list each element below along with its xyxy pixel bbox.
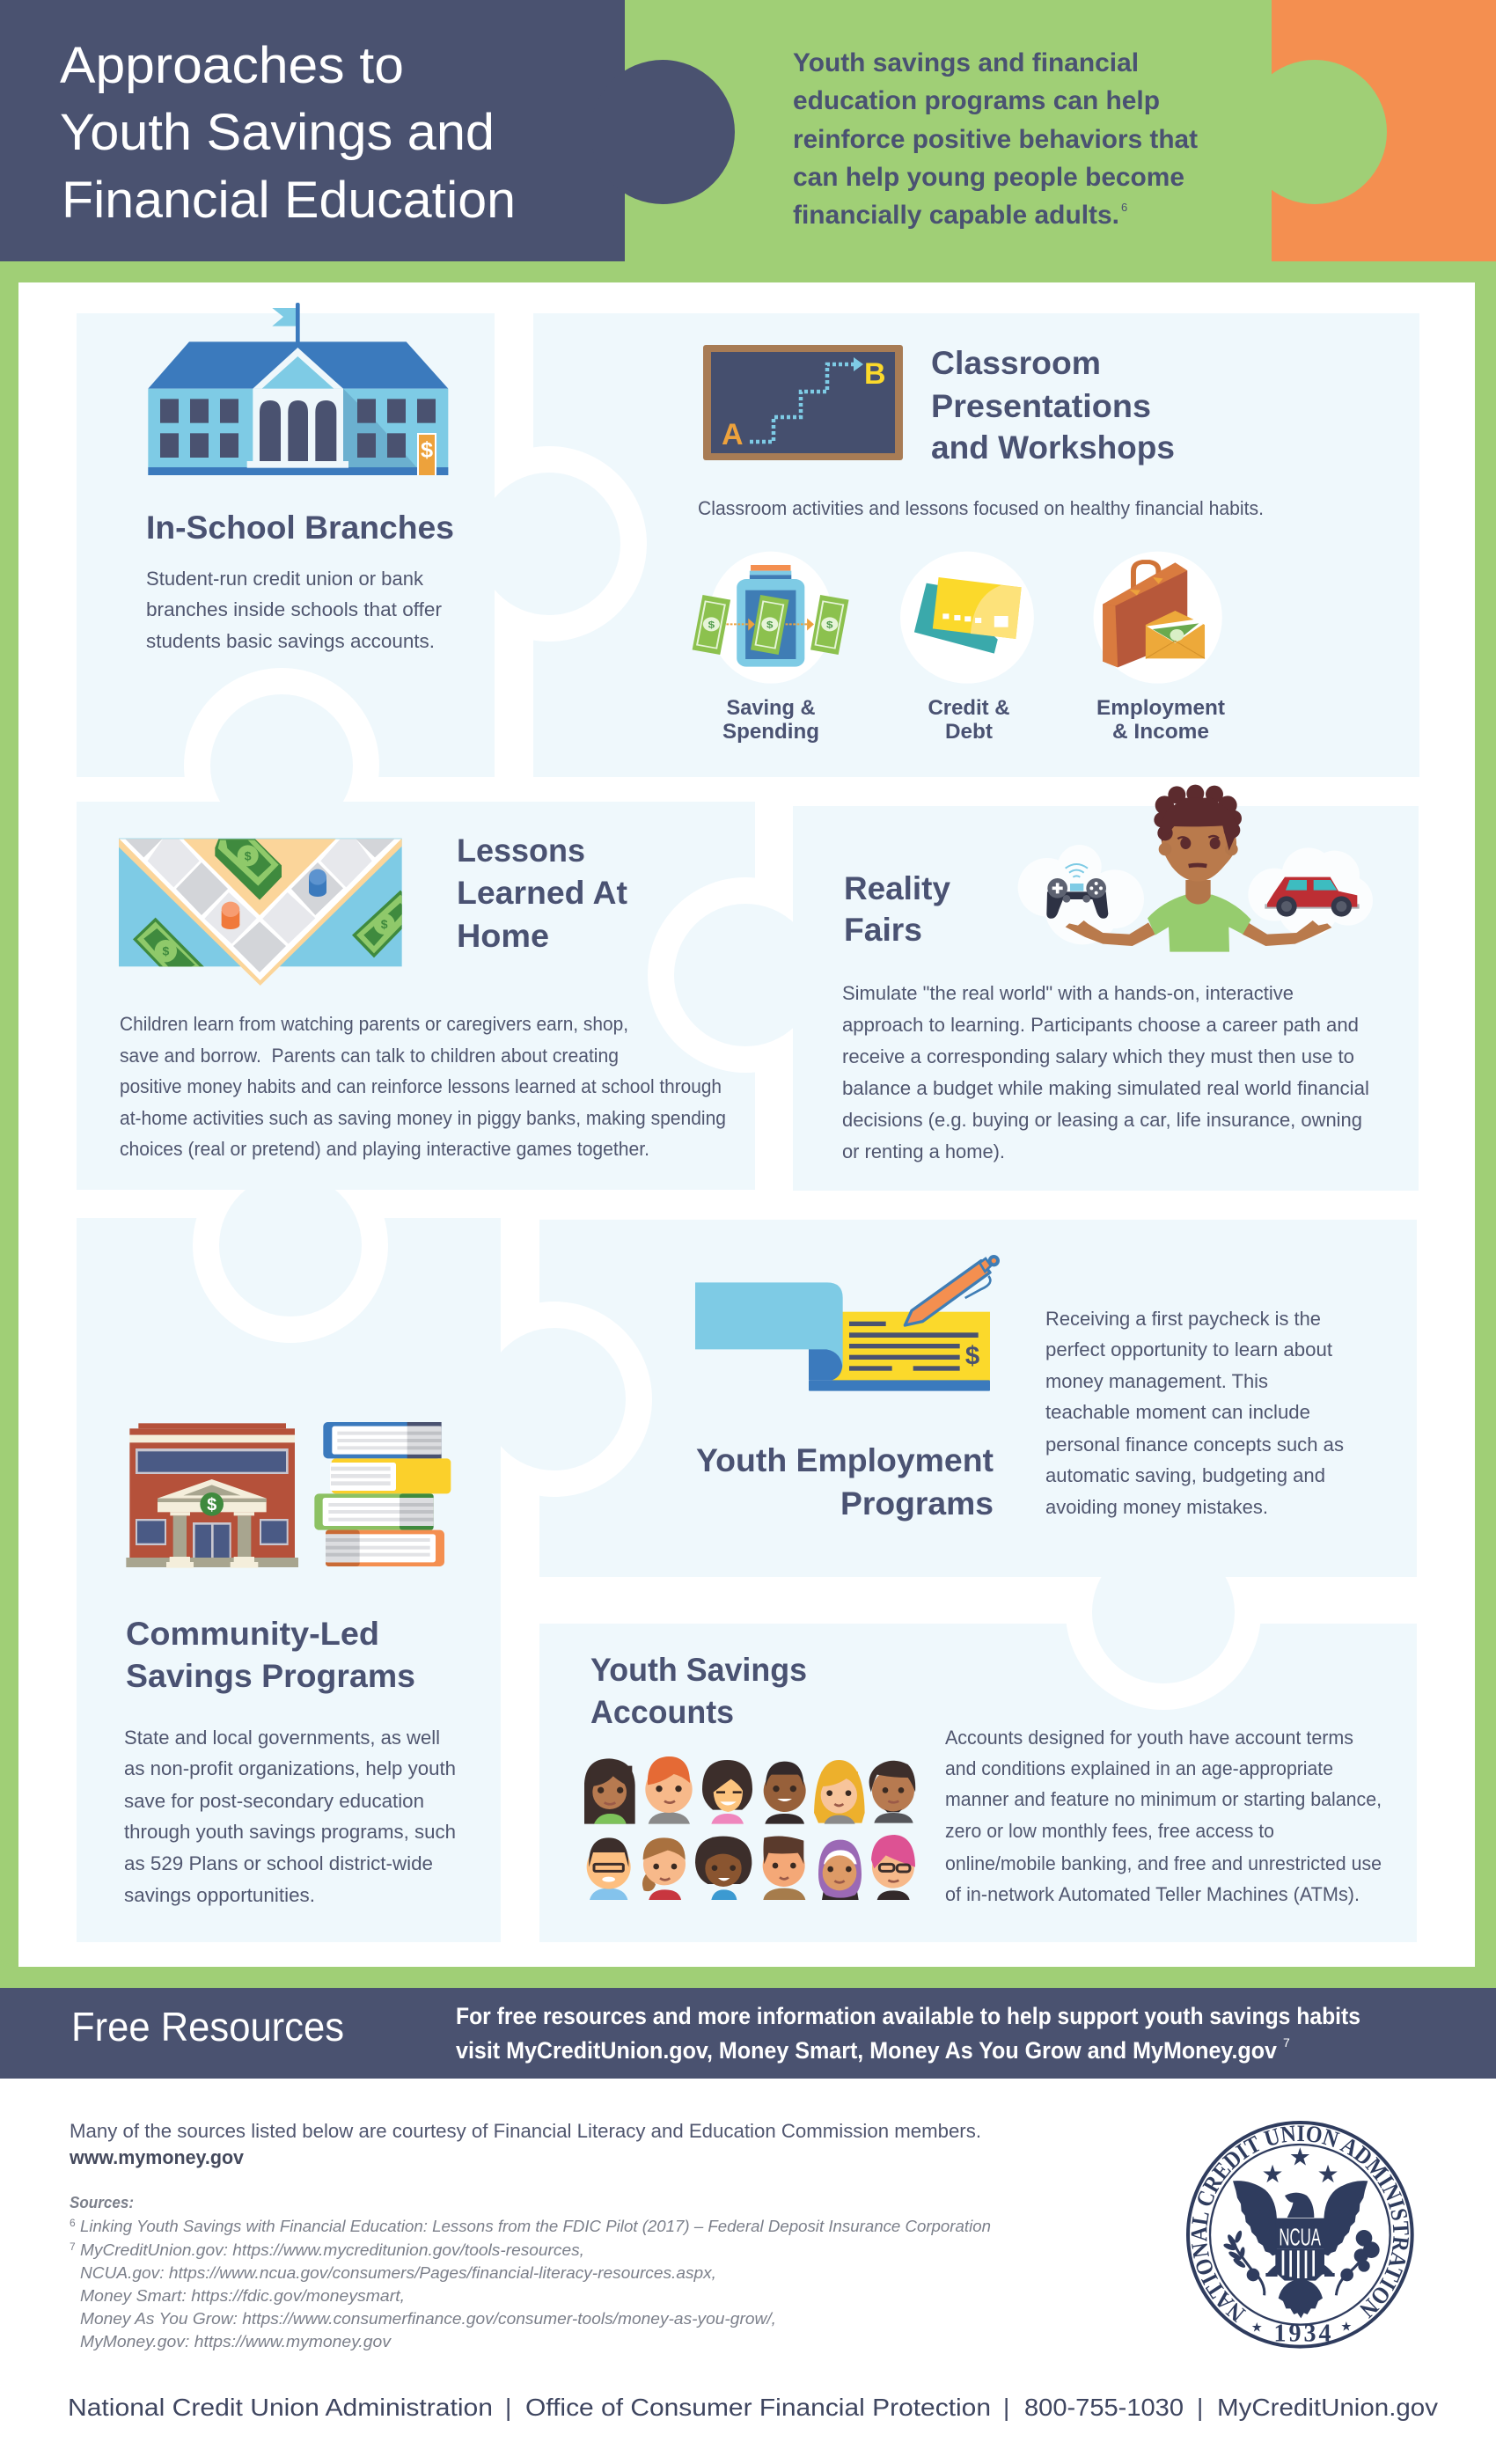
seal: National Credit Union Administration: ★ [1340,2320,1353,2334]
icon: school building: $ [421,437,433,462]
band text [456,2003,1360,2064]
seal: National Credit Union Administration: ★ [1261,2160,1284,2188]
body text: Student-run credit union or bank [146,568,424,590]
footer contact line: National Credit Union Administration [68,2394,493,2421]
body text: approach to learning. Participants choose a career path and [842,1014,1359,1036]
sources list: Sources: [70,2193,134,2211]
label: Saving & [727,696,815,720]
heading: Fairs [844,912,922,948]
body text: as non-profit organizations, help youth [124,1757,456,1779]
body text: save for post-secondary education [124,1790,424,1812]
white content panel [18,282,1475,1967]
icon: chalkboard [703,345,903,460]
body text: through youth savings programs, such [124,1821,456,1843]
body text: perfect opportunity to learn about [1045,1338,1332,1360]
sources list: Money Smart: https://fdic.gov/moneysmart, [80,2286,405,2305]
body text: choices (real or pretend) and playing interactive games together. [120,1138,649,1160]
seal: National Credit Union Administration: 1934 [1273,2321,1331,2348]
footer contact line: | [505,2394,511,2421]
intro text: can help young people become [793,163,1184,192]
header: green puzzle tab [1243,60,1387,204]
body text: online/mobile banking, and free and unrestricted use [945,1852,1382,1874]
intro text: reinforce positive behaviors that [793,125,1198,154]
label [1096,696,1225,744]
body text: teachable moment can include [1045,1401,1310,1423]
body text [945,1727,1382,1905]
body text: branches inside schools that offer [146,598,442,620]
label [928,696,1010,744]
footer contact line [68,2394,1438,2421]
icon: group of young people [584,1756,915,1900]
icon: school building [148,303,448,475]
body text [146,568,442,652]
label: Debt [945,720,993,744]
body text [1045,1308,1344,1518]
panel: youth savings accounts [584,1652,1382,1905]
label [722,696,819,744]
free resources band [0,1988,1496,2079]
icon: saving and spending jar [693,552,849,684]
body text: balance a budget while making simulated real world financial [842,1077,1369,1099]
footer contact line: Office of Consumer Financial Protection [525,2394,991,2421]
header: orange block [1272,0,1496,261]
icon: saving and spending jar: $ [826,619,833,630]
body text: manner and feature no minimum or starting balance, [945,1788,1382,1810]
sources list: 7 [70,2240,76,2253]
heading [844,870,950,948]
body text: Accounts designed for youth have account terms [945,1727,1353,1749]
puzzle panels background [77,313,1419,1942]
body text: and conditions explained in an age-appropriate [945,1757,1333,1779]
band text: visit MyCreditUnion.gov, Money Smart, Money As You Grow and MyMoney.gov [456,2037,1277,2064]
heading: Accounts [590,1694,734,1730]
intro text [793,48,1198,230]
icon: saving and spending jar: $ [708,619,715,630]
body text [842,982,1369,1162]
heading: Lessons [457,832,585,869]
heading [126,1616,415,1694]
body text: State and local governments, as well [124,1727,440,1749]
icon: paycheck and pen [695,1255,1000,1391]
heading: Classroom [931,345,1101,381]
note on sources: www.mymoney.gov [69,2146,245,2168]
icon: board game [119,839,421,992]
intro text: education programs can help [793,86,1160,115]
heading: In-School Branches [146,510,454,546]
seal: National Credit Union Administration: ★ [1316,2160,1339,2188]
footer contact line: MyCreditUnion.gov [1217,2394,1438,2421]
body text: students basic savings accounts. [146,630,435,652]
seal: National Credit Union Administration: ★ [1289,2144,1311,2171]
sources list: 6 [70,2217,76,2229]
body text: Simulate "the real world" with a hands-on, interactive [842,982,1294,1004]
heading: Youth Savings [590,1652,807,1688]
icon: briefcase and envelope [1094,552,1222,684]
body text: positive money habits and can reinforce lessons learned at school through [120,1075,722,1097]
body text: at-home activities such as saving money in piggy banks, making spending [120,1107,726,1129]
footer contact line: | [1197,2394,1203,2421]
body text [120,1013,726,1160]
sources list: Money As You Grow: https://www.consumerfinance.gov/consumer-tools/money-as-you-grow/, [80,2309,776,2328]
panel: in-school branches [146,303,454,652]
label: & Income [1112,720,1209,744]
sources list: MyMoney.gov: https://www.mymoney.gov [80,2332,392,2350]
title: Approaches to [60,37,404,94]
intro text: 6 [1121,201,1127,214]
seal: National Credit Union Administration: NCUA [1279,2224,1321,2251]
body text: as 529 Plans or school district-wide [124,1852,433,1874]
heading: Programs [840,1485,994,1522]
body text: save and borrow. Parents can talk to children about creating [120,1045,619,1067]
heading: Youth Employment [696,1442,994,1478]
icon: paycheck and pen: $ [965,1342,979,1371]
icon: board game: $ [245,848,252,862]
body text: zero or low monthly fees, free access to [945,1820,1274,1842]
heading: Reality [844,870,950,906]
icon: board game: $ [381,917,388,931]
note on sources [69,2120,981,2168]
footer contact line: | [1003,2394,1009,2421]
heading [590,1652,807,1730]
body text: automatic saving, budgeting and [1045,1464,1325,1486]
title: Financial Education [62,172,516,229]
body text: money management. This [1045,1370,1268,1392]
icon: stack of books [314,1422,451,1566]
heading [931,345,1175,466]
body text: receive a corresponding salary which they must then use to [842,1045,1354,1067]
heading: Savings Programs [126,1658,415,1694]
panel: community-led savings programs [124,1422,456,1906]
seal: National Credit Union Administration: ★ [1251,2321,1263,2335]
label: Credit & [928,696,1010,720]
band text: For free resources and more information available to help support youth savings habits [456,2003,1360,2029]
body text [124,1727,456,1906]
label: Spending [722,720,819,744]
heading: Home [457,918,549,954]
body text: decisions (e.g. buying or leasing a car, life insurance, owning [842,1109,1362,1131]
sources list: Linking Youth Savings with Financial Education: Lessons from the FDIC Pilot (2017) – Federal Deposit Insurance Corporation [80,2217,991,2235]
heading [457,832,627,954]
body text: Children learn from watching parents or caregivers earn, shop, [120,1013,628,1035]
body text: of in-network Automated Teller Machines (ATMs). [945,1883,1360,1905]
intro text: Youth savings and financial [793,48,1139,77]
icon: bank building: $ [207,1496,216,1515]
icon: bank building [126,1423,298,1568]
footer contact line: 800-755-1030 [1024,2394,1184,2421]
title [60,37,516,229]
icon: chalkboard: B [864,357,886,391]
band title: Free Resources [71,2004,344,2050]
icon: board game: $ [162,944,169,958]
body text: personal finance concepts such as [1045,1434,1344,1456]
seal: National Credit Union Administration: NATIONAL CREDIT UNION ADMINISTRATION [1192,2125,1409,2323]
body text: Receiving a first paycheck is the [1045,1308,1321,1330]
heading [696,1442,994,1522]
panel: classroom presentations and workshops [693,345,1264,744]
icon: person with controller and car [1018,785,1373,952]
panel: lessons learned at home [119,832,726,1160]
heading: Presentations [931,388,1151,424]
heading: Community-Led [126,1616,379,1652]
body text: avoiding money mistakes. [1045,1496,1268,1518]
band text: 7 [1283,2035,1290,2050]
label: Employment [1096,696,1225,720]
body text: or renting a home). [842,1140,1005,1162]
title: Youth Savings and [60,104,495,161]
icon: credit cards [900,552,1034,684]
sources list: MyCreditUnion.gov: https://www.mycreditunion.gov/tools-resources, [80,2240,584,2259]
body text: Classroom activities and lessons focused on healthy financial habits. [698,497,1264,519]
header: navy title block [0,0,735,261]
icon: chalkboard: A [722,418,744,451]
panel: reality fairs [842,785,1373,1162]
body text: savings opportunities. [124,1884,315,1906]
heading: and Workshops [931,429,1175,466]
icon: saving and spending jar: $ [766,619,774,630]
note on sources: Many of the sources listed below are courtesy of Financial Literacy and Education Commission members. [70,2120,981,2142]
sources list [70,2193,991,2350]
panel: youth employment programs [695,1255,1344,1522]
sources list: NCUA.gov: https://www.ncua.gov/consumers/Pages/financial-literacy-resources.aspx, [80,2263,716,2282]
heading: Learned At [457,875,627,911]
intro text: financially capable adults. [793,201,1119,230]
